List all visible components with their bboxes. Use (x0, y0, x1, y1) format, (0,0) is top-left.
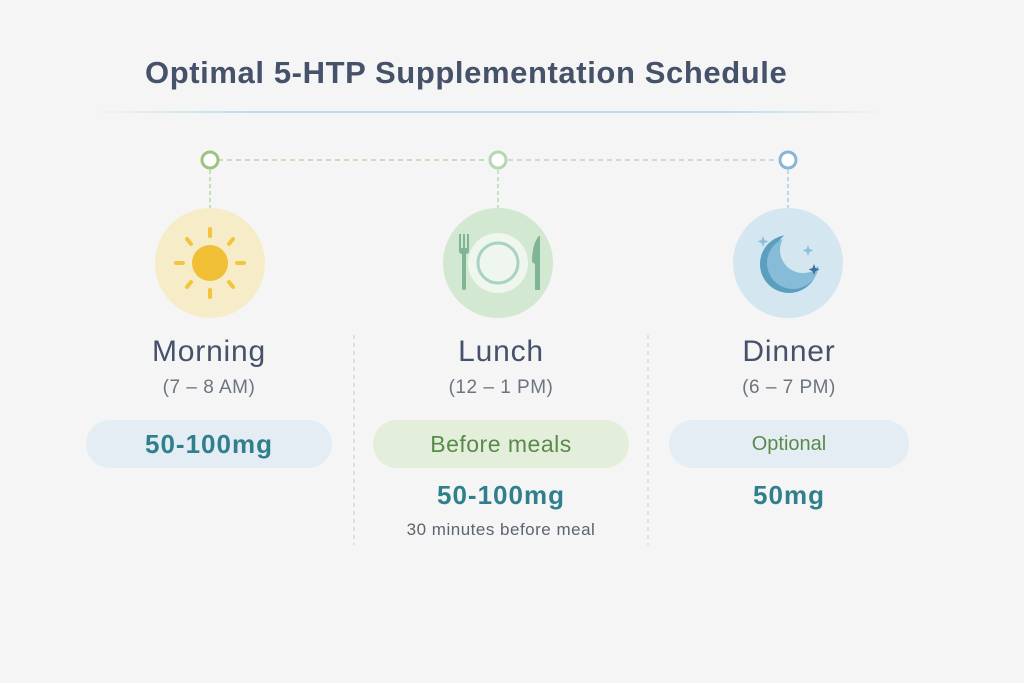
column: dinner: Optional (752, 433, 826, 455)
column: morning: 50-100mg (145, 429, 273, 459)
icon: plate (443, 208, 553, 318)
column: lunch: 50-100mg (437, 480, 565, 510)
column: dinner: 50mg (753, 480, 825, 510)
column: dinner: (6 – 7 PM) (742, 377, 836, 398)
column: dinner (669, 335, 909, 510)
column: lunch: Before meals (430, 431, 572, 457)
column: dinner: Dinner (742, 335, 836, 368)
column: lunch: 30 minutes before meal (407, 520, 595, 539)
column: lunch: Lunch (458, 335, 544, 368)
icon: moon (733, 208, 843, 318)
column: morning: (7 – 8 AM) (163, 377, 255, 398)
icon: sun (155, 208, 265, 318)
column: lunch: (12 – 1 PM) (449, 377, 553, 398)
column: morning: Morning (152, 335, 266, 368)
column: morning (86, 335, 332, 468)
column: lunch (373, 335, 629, 539)
title: Optimal 5-HTP Supplementation Schedule (145, 55, 787, 90)
